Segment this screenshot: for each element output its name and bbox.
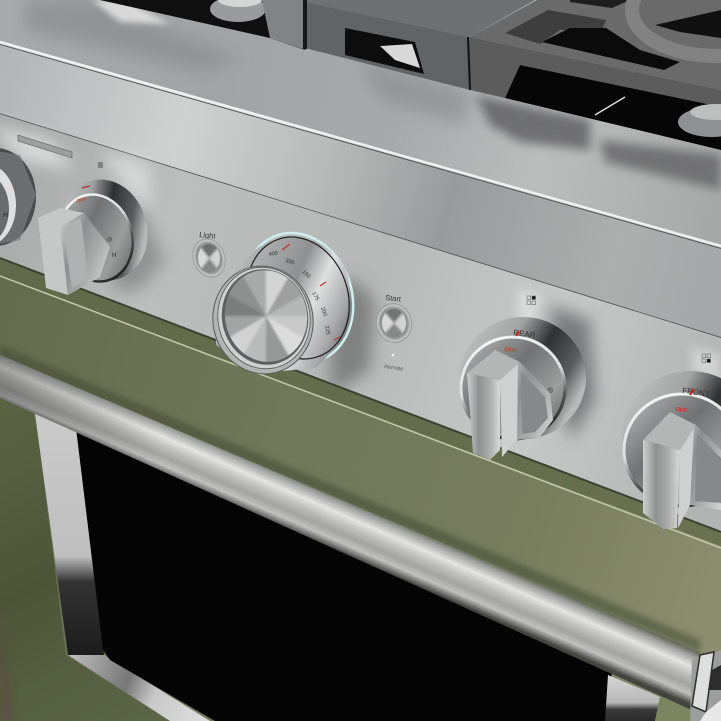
knob: rear burner bbox=[460, 317, 586, 460]
label: Start: Start bbox=[385, 293, 402, 304]
dial spun face bbox=[224, 270, 308, 362]
light button bbox=[192, 232, 226, 278]
start button bbox=[376, 295, 412, 370]
scale numbers: 150 bbox=[301, 269, 311, 280]
icon: rear burner position bbox=[527, 296, 536, 304]
slot indicator bbox=[18, 135, 72, 158]
oven handle bbox=[0, 355, 721, 721]
icon: burner position, left bbox=[98, 162, 103, 168]
knob: front burner: FRONT bbox=[682, 386, 710, 399]
scale numbers: 200 bbox=[319, 307, 328, 317]
panel bottom green band bbox=[0, 258, 721, 721]
knob: left burner: OFF bbox=[76, 197, 87, 205]
scale numbers: 225 bbox=[323, 325, 331, 335]
label: Light: Light bbox=[199, 230, 217, 241]
illuminated ring bbox=[226, 219, 370, 377]
dial outer rim bbox=[203, 257, 323, 383]
label: Remote: Remote bbox=[384, 364, 404, 373]
icon: front burner position bbox=[702, 354, 710, 362]
knob: left burner: H bbox=[112, 253, 116, 259]
scale numbers: 175 bbox=[310, 291, 320, 302]
dial barrel bbox=[215, 238, 350, 373]
far-left knob bbox=[0, 148, 36, 246]
cooktop rear surface bbox=[0, 0, 721, 260]
scale numbers: 300 bbox=[284, 258, 295, 266]
opening under front bar bbox=[505, 65, 721, 150]
status dot bbox=[392, 354, 394, 356]
dial: oven temperature selector bbox=[212, 232, 354, 374]
knob: front burner bbox=[622, 371, 721, 529]
knob: rear burner: ◎ bbox=[547, 387, 553, 394]
knob: front burner: OFF bbox=[675, 407, 688, 415]
grate: rear-left opening and burner bbox=[100, 0, 305, 50]
knob: rear burner: REAR bbox=[513, 328, 536, 340]
far-left knob: H bbox=[3, 212, 8, 219]
burner ring bbox=[632, 0, 721, 56]
knob: left burner: ◎ bbox=[107, 237, 112, 243]
grate: right block with burner ring bbox=[468, 0, 721, 150]
scale numbers bbox=[268, 250, 331, 335]
knob grip bbox=[643, 412, 721, 529]
grate openings bbox=[505, 10, 606, 44]
control panel bbox=[0, 114, 721, 532]
knob: rear burner: OFF bbox=[504, 347, 517, 355]
front burner bbox=[678, 107, 721, 137]
oven door bbox=[0, 395, 721, 721]
knob: left burner bbox=[38, 170, 159, 295]
scale numbers: 400 bbox=[268, 250, 278, 258]
knob grip bbox=[467, 350, 553, 460]
knob grip bbox=[38, 208, 110, 295]
grate: centre block bbox=[303, 0, 535, 90]
cooktop front lip bbox=[0, 42, 721, 338]
handle end cap bbox=[690, 650, 721, 721]
